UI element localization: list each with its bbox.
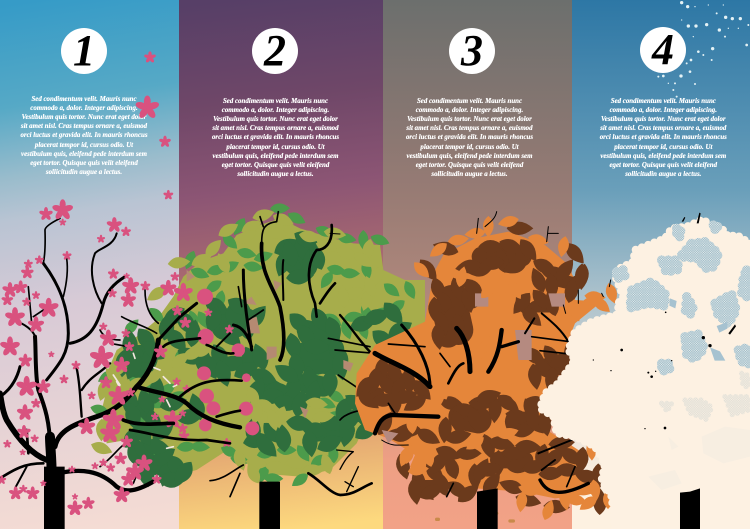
tree 2 blossoms	[197, 289, 259, 435]
number badge 3	[449, 28, 495, 74]
falling blossoms	[135, 51, 171, 148]
panel 4 text: eget tortor. Quisque quis velit eleifend	[610, 162, 717, 169]
panel 2 text: commodo a, dolor. Integer adipiscing.	[222, 107, 329, 114]
number badge 4	[640, 27, 686, 73]
number badge 1: 1	[73, 26, 95, 75]
tree 3: autumn orange tree	[355, 212, 612, 529]
panel 3 text	[406, 98, 533, 178]
panel 1 text: orci luctus et gravida elit. In mauris rhoncus	[20, 132, 148, 139]
panel 3 text: commodo a, dolor. Integer adipiscing.	[416, 107, 523, 114]
panel 1 text: Vestibulum quis tortor. Nunc erat eget dolor	[22, 114, 146, 121]
panel 2 text: eget tortor. Quisque quis velit eleifend	[222, 162, 329, 169]
panel 4 text: placerat tempor id, cursus odio. Ut	[614, 144, 712, 151]
panel 1 text	[20, 96, 148, 176]
panel 2 text: orci luctus et gravida elit. In mauris rhoncus	[212, 134, 339, 141]
panel 4 text: commodo a, dolor. Integer adipiscing.	[610, 107, 717, 114]
tree 4 faint lower patches	[662, 373, 748, 419]
panel 1 text: sit amet nisl. Cras tempus ornare a, euismod	[21, 123, 147, 130]
number badge 1	[61, 28, 107, 74]
panel 1 text: sollicitudin augue a lectus.	[46, 169, 122, 176]
panel 4 text: sollicitudin augue a lectus.	[625, 171, 701, 178]
tree 1 trunk	[44, 467, 65, 529]
panel 4 text: vestibulum quis, eleifend pede interdum sem	[600, 153, 726, 160]
tree 4 dotted sky gaps	[617, 225, 748, 371]
panel 3 text: eget tortor. Quisque quis velit eleifend	[416, 162, 523, 169]
number badge 3: 3	[461, 26, 483, 75]
tree 1: spring blossom tree	[0, 190, 375, 529]
falling snow dots	[657, 1, 749, 101]
tree 2: summer green canopy	[100, 208, 425, 480]
number badge 2	[252, 28, 298, 74]
panel 4 text: Vestibulum quis tortor. Nunc erat eget dolor	[601, 116, 726, 123]
panel 2 text: Sed condimentum velit. Mauris nunc	[223, 98, 328, 105]
panel 2 text	[212, 98, 339, 178]
tree 4 trunk and specks	[593, 213, 736, 529]
panel 2 text: sollicitudin augue a lectus.	[237, 171, 314, 178]
panel 4 text: sit amet nisl. Cras tempus ornare a, euismod	[600, 125, 726, 132]
tree 1 blossoms	[0, 190, 234, 516]
panel 2 text: vestibulum quis, eleifend pede interdum sem	[213, 153, 338, 160]
tree 4: winter snowy tree	[540, 213, 750, 529]
panel 4 text: Sed condimentum velit. Mauris nunc	[611, 98, 716, 105]
panel 1 text: eget tortor. Quisque quis velit eleifend	[30, 160, 138, 167]
panel 2 text: sit amet nisl. Cras tempus ornare a, euismod	[212, 125, 339, 132]
number badge 4: 4	[652, 25, 674, 74]
panel 3 text: sollicitudin augue a lectus.	[431, 171, 508, 178]
panel 1 text: Sed condimentum velit. Mauris nunc	[31, 96, 137, 103]
panel 3 text: placerat tempor id, cursus odio. Ut	[420, 144, 519, 151]
panel 3 text: sit amet nisl. Cras tempus ornare a, euismod	[406, 125, 533, 132]
panel 4 text	[600, 98, 727, 178]
panel 1 text: commodo a, dolor. Integer adipiscing.	[30, 105, 138, 112]
panel 3 text: vestibulum quis, eleifend pede interdum sem	[407, 153, 532, 160]
number badge 2: 2	[264, 26, 286, 75]
tree 3 branches and trunk	[375, 212, 611, 529]
panel 2 text: placerat tempor id, cursus odio. Ut	[226, 144, 325, 151]
panel 4 text: orci luctus et gravida elit. In mauris rhoncus	[600, 134, 727, 141]
panel 2 text: Vestibulum quis tortor. Nunc erat eget dolor	[213, 116, 338, 123]
panel 1 text: placerat tempor id, cursus odio. Ut	[35, 142, 133, 149]
panel 3 text: Vestibulum quis tortor. Nunc erat eget dolor	[407, 116, 532, 123]
panel 3 text: orci luctus et gravida elit. In mauris rhoncus	[406, 134, 533, 141]
panel 1 text: vestibulum quis, eleifend pede interdum sem	[21, 151, 147, 158]
tree 2 branches and trunk	[123, 212, 375, 529]
panel 3 text: Sed condimentum velit. Mauris nunc	[417, 98, 522, 105]
